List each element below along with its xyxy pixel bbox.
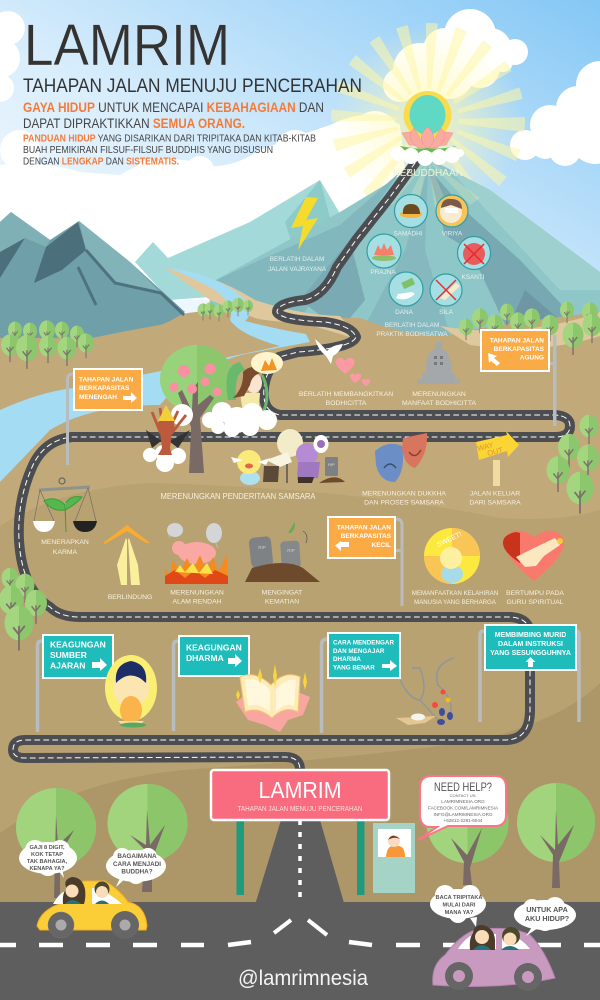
help bubble: CONTACT US: [450, 793, 476, 798]
label: karma: KARMA [53, 549, 78, 556]
description text [23, 134, 316, 168]
main sign: TAHAPAN JALAN MENUJU PENCERAHAN [238, 804, 362, 813]
icon: lightning [291, 197, 318, 250]
pig and fire [165, 523, 228, 584]
speech bubble: tripitaka: MULAI DARI [443, 902, 476, 908]
intro text [23, 100, 324, 131]
icon: baby in sun: SWEET! [436, 531, 463, 549]
main road [13, 163, 570, 770]
label: vajrayana [268, 256, 327, 273]
label: bodhisatwa: PRAKTIK BODHISATWA [376, 331, 448, 338]
label: kelahiran [412, 590, 498, 606]
peak emblem: jewel on lotus [391, 91, 464, 166]
gravestones: RIP [258, 545, 266, 550]
icon: dove [315, 339, 343, 364]
label: manfaat bodhicitta: MANFAAT BODHICITTA [402, 400, 476, 407]
masks [375, 433, 427, 482]
open book on lotus [236, 664, 310, 732]
main sign [211, 770, 389, 820]
grave: RIP [328, 462, 335, 467]
viriya [436, 195, 468, 227]
label: jalan keluar: DARI SAMSARA [469, 500, 521, 506]
sign: keagungan dharma: KEAGUNGAN [186, 642, 242, 652]
label: vajrayana: JALAN VAJRAYANA [268, 266, 327, 273]
paramita labels: PRAJNA [370, 269, 396, 276]
trees right [546, 415, 599, 514]
demon on cloud [143, 404, 193, 472]
label: alam rendah [170, 590, 224, 606]
way out sign: OUT [486, 445, 504, 458]
icon: baby in sun [424, 528, 480, 584]
clouds [0, 9, 600, 300]
paramita labels [370, 230, 485, 316]
trees bottom [16, 783, 595, 898]
speech bubble: tripitaka: BACA TRIPITAKA [436, 895, 482, 901]
passenger [501, 927, 520, 950]
help bubble: FACEBOOK.COM/LAMRIMNESIA [428, 805, 499, 810]
trees top right [459, 302, 600, 355]
sign: menengah: BERKAPASITAS [79, 385, 130, 392]
label: kebuddhaan: KEBUDDHAAN [393, 168, 463, 179]
intro text: DAPAT DIPRAKTIKKAN SEMUA ORANG. [23, 116, 245, 131]
prajna [367, 234, 401, 268]
trees left lower [0, 568, 47, 651]
sign: cara mendengar: YANG BENAR [333, 664, 375, 672]
sign: cara mendengar [322, 633, 400, 733]
crying baby [231, 450, 270, 485]
sila [430, 274, 462, 306]
speech bubble: gaji: TAK BAHAGIA, [27, 859, 68, 865]
label: guru spiritual: BERTUMPU PADA [506, 590, 564, 597]
icon: stupa [417, 342, 460, 384]
speech bubble: bagaimana: BUDDHA? [121, 868, 153, 876]
trees top left [1, 320, 94, 369]
label: karma [41, 539, 89, 556]
speech bubble: untuk apa [514, 897, 576, 936]
help bubble: LAMRIMNESIA.ORG [441, 799, 485, 804]
driver [63, 877, 85, 904]
buddha figure [105, 655, 157, 728]
speech bubble: gaji: KOK TETAP [31, 852, 63, 858]
paramita labels: SILA [439, 309, 454, 316]
sign: keagungan sumber ajaran: AJARAN [50, 660, 85, 670]
speech bubble: gaji: GAJI 8 DIGIT, [29, 845, 65, 851]
speech bubble: tripitaka: MANA YA? [445, 910, 474, 916]
label: jalan keluar: JALAN KELUAR [470, 490, 520, 498]
fruit tree [160, 345, 234, 473]
sign: cara mendengar: DHARMA [333, 656, 361, 663]
label: kematian: MENGINGAT [262, 590, 302, 596]
sign: menengah: TAHAPAN JALAN [79, 376, 134, 384]
sign: kecil [328, 517, 402, 606]
sign: agung [481, 330, 556, 426]
sky background [0, 0, 600, 340]
label: dukkha: DAN PROSES SAMSARA [364, 500, 444, 506]
description text: DENGAN LENGKAP DAN SISTEMATIS. [23, 156, 179, 168]
paramita labels: SAMADHI [393, 230, 423, 238]
label: karma: MENERAPKAN [41, 539, 89, 546]
paramita labels: DANA [395, 309, 414, 316]
sign: kecil: TAHAPAN JALAN [337, 524, 391, 532]
trees center [198, 298, 253, 321]
sign: keagungan sumber ajaran [38, 635, 113, 732]
icon: hearts [335, 358, 370, 386]
label: bodhisatwa: BERLATIH DALAM [385, 322, 439, 329]
sand and ground [0, 311, 600, 1000]
label: dukkha: MERENUNGKAN DUKKHA [362, 490, 446, 498]
scales: karma [33, 478, 97, 532]
driver [470, 925, 495, 950]
label: kelahiran: MANUSIA YANG BERHARGA [414, 599, 497, 606]
label: manfaat bodhicitta [402, 391, 476, 407]
subtitle: TAHAPAN JALAN MENUJU PENCERAHAN [23, 76, 362, 97]
speech bubble: untuk apa: AKU HIDUP? [525, 914, 569, 923]
sign: membimbing: YANG SESUNGGUHNYA [490, 650, 571, 657]
label: guru spiritual: GURU SPIRITUAL [506, 599, 564, 606]
sign: agung: TAHAPAN JALAN [490, 338, 544, 344]
label: bodhicitta [299, 391, 393, 407]
gravestones [245, 522, 320, 582]
label: vajrayana: BERLATIH DALAM [270, 256, 324, 263]
sign: keagungan dharma [174, 636, 249, 731]
yellow car [37, 877, 147, 939]
speech bubble: bagaimana: BAGAIMANA [117, 853, 157, 860]
sign: cara mendengar: DAN MENGAJAR [333, 648, 385, 655]
road bottom [0, 820, 600, 1000]
sign: membimbing: DALAM INSTRUKSI [498, 641, 563, 648]
wheels [48, 911, 139, 939]
sign: membimbing: MEMBIMBING MURID [495, 632, 566, 639]
river [0, 268, 310, 482]
speech bubble: tripitaka [430, 885, 486, 927]
help bubble: NEED HELP? [434, 780, 492, 794]
speech bubble: untuk apa: UNTUK APA [526, 905, 568, 914]
jewel [404, 91, 452, 139]
thought bubble [251, 352, 283, 374]
sign: keagungan sumber ajaran: SUMBER [50, 650, 87, 660]
leaves [400, 146, 456, 155]
intro text: GAYA HIDUP UNTUK MENCAPAI KEBAHAGIAAN DAN [23, 100, 324, 115]
passenger [94, 882, 110, 904]
ksanti [458, 236, 490, 270]
way out sign [476, 431, 519, 486]
speech bubble: bagaimana: CARA MENJADI [113, 861, 161, 868]
left mountains [0, 212, 185, 338]
label: kematian: KEMATIAN [265, 598, 299, 606]
sign: membimbing [480, 625, 579, 722]
pale back mountains [135, 180, 345, 300]
sign: agung: AGUNG [520, 354, 544, 362]
old man [263, 429, 303, 483]
dana [389, 272, 423, 306]
label: penderitaan samsara: MERENUNGKAN PENDERITAAN SAMSARA [160, 491, 316, 501]
icon: heart with hands [503, 530, 564, 581]
title: LAMRIM [24, 13, 230, 78]
label: jalan keluar [469, 490, 521, 506]
purple car [433, 925, 555, 991]
lotus [402, 127, 453, 149]
sick person [296, 443, 320, 483]
help bubble: +62812-2281-6044 [444, 818, 483, 823]
goddess on cloud [202, 352, 283, 437]
speech bubble: bagaimana [106, 848, 166, 887]
paramita labels: VIRIYA [442, 230, 463, 238]
main mountain [205, 158, 600, 340]
label: dukkha [362, 490, 446, 506]
sign posts [236, 820, 364, 895]
sign: menengah: MENENGAH [79, 394, 117, 401]
icon: praying hands [103, 525, 150, 585]
sign: agung: BERKAPASITAS [494, 346, 545, 353]
description text: PANDUAN HIDUP YANG DISARIKAN DARI TRIPITAKA DAN KITAB-KITAB [23, 134, 316, 144]
paramita circles [367, 194, 490, 306]
gravestones: RIP [287, 548, 295, 553]
sign: kecil: BERKAPASITAS [341, 533, 392, 540]
stethoscope offerings [396, 658, 454, 725]
help bubble: INFO@LAMRIMNESIA.ORG [433, 812, 493, 817]
paramita labels: KSANTI [461, 274, 485, 281]
way out sign: WAY [476, 440, 494, 453]
cloud base [391, 147, 464, 166]
label: bodhicitta: BERLATIH MEMBANGKITKAN [299, 391, 393, 398]
sun rays glow [333, 25, 523, 215]
label: bodhicitta: BODHICITTA [326, 400, 367, 407]
handle: @lamrimnesia [238, 967, 368, 990]
speech bubble: gaji [19, 840, 77, 878]
label: kematian [262, 590, 302, 606]
wheels [445, 962, 542, 991]
description text: BUAH PEMIKIRAN FILSUF-FILSUF BUDDHIS YANG DISUSUN [23, 145, 273, 156]
help bubble [418, 776, 506, 840]
sign: cara mendengar: CARA MENDENGAR [333, 640, 394, 646]
label: kelahiran: MEMANFAATKAN KELAHIRAN [412, 590, 498, 597]
skull bubble [314, 435, 328, 453]
sign: kecil: KECIL [372, 542, 391, 549]
suffering figures [231, 429, 345, 485]
label: berlindung: BERLINDUNG [108, 594, 152, 601]
speech bubble: gaji: KENAPA YA? [29, 866, 65, 872]
label: manfaat bodhicitta: MERENUNGKAN [412, 391, 466, 398]
booth [373, 823, 415, 893]
label: alam rendah: ALAM RENDAH [172, 598, 222, 606]
samadhi [394, 194, 428, 228]
sign: menengah [68, 369, 142, 465]
sign: keagungan sumber ajaran: KEAGUNGAN [50, 640, 106, 650]
label: guru spiritual [506, 590, 564, 606]
main sign: LAMRIM [258, 777, 342, 803]
label: alam rendah: MERENUNGKAN [170, 590, 224, 596]
label: bodhisatwa [376, 322, 448, 338]
sign: keagungan dharma: DHARMA [186, 653, 224, 663]
